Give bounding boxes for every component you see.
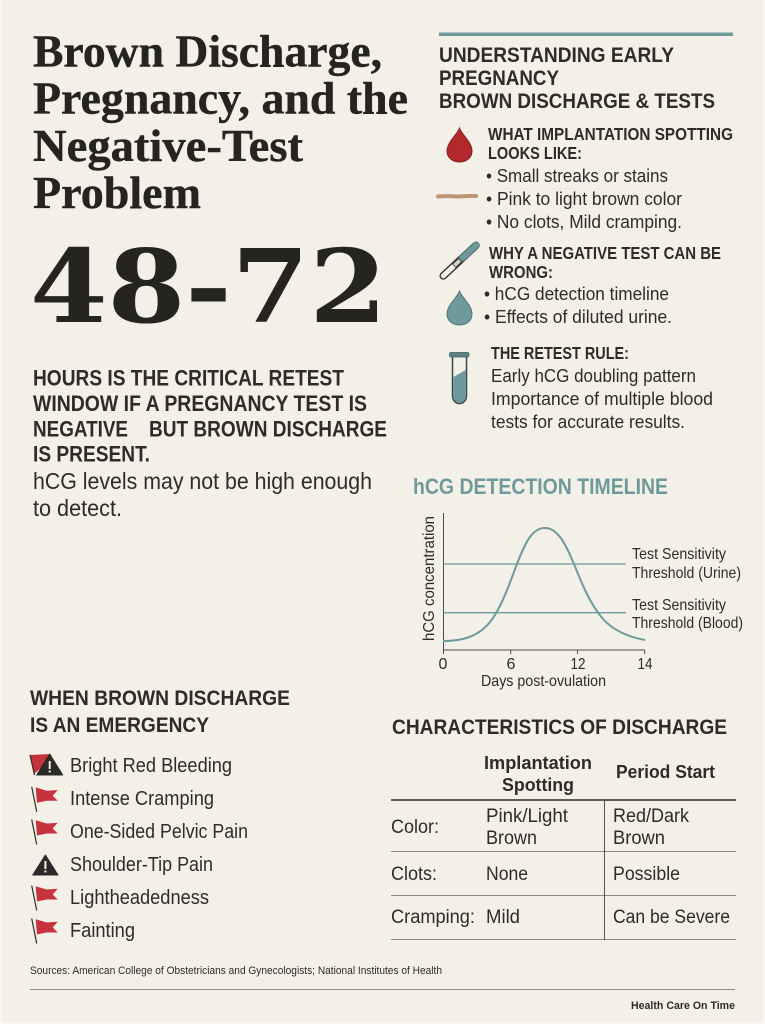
panel: understanding early pregnancy — [438, 32, 733, 432]
icon: brown streak — [438, 194, 476, 198]
table cells: Possible — [613, 864, 680, 885]
axis label: x: Days post-ovulation — [481, 673, 606, 690]
text block: implantation spotting: WHAT IMPLANTATION SPOTTING — [488, 124, 733, 144]
text block: implantation spotting: • Small streaks or stains — [486, 165, 668, 186]
heading: understanding — [439, 43, 715, 113]
axis label: y: hCG concentration — [421, 516, 438, 641]
text block: retest window: hCG levels may not be high enough — [33, 468, 372, 494]
column headers: Spotting — [502, 775, 574, 795]
list: warning signs: Shoulder-Tip Pain — [70, 854, 213, 876]
icon: water drop — [447, 291, 472, 325]
column headers — [484, 753, 715, 795]
text block: retest window — [33, 366, 387, 521]
icon: flag — [32, 787, 58, 812]
title: Negative-Test — [33, 121, 303, 171]
title — [33, 26, 408, 218]
icon: flag and warning — [30, 754, 63, 775]
tick labels — [439, 656, 653, 673]
text block: retest window: to detect. — [33, 495, 122, 521]
text block: retest rule: THE RETEST RULE: — [491, 343, 629, 363]
text block: implantation spotting: • Pink to light brown color — [486, 188, 682, 209]
list: warning signs — [70, 755, 248, 942]
heading: characteristics: CHARACTERISTICS OF DISCHARGE — [392, 715, 727, 739]
panel: characteristics table — [391, 715, 736, 940]
icon: flag — [32, 918, 58, 944]
threshold labels: Test Sensitivity — [632, 597, 726, 614]
text block: implantation spotting — [486, 124, 733, 232]
icon: blood drop — [447, 128, 472, 162]
panel: emergency signs — [30, 687, 290, 944]
heading: understanding: PREGNANCY — [439, 66, 559, 90]
text block: retest window: HOURS IS THE CRITICAL RETEST — [33, 366, 344, 390]
table cells: Brown — [486, 828, 537, 849]
icon: flag — [32, 820, 58, 844]
text block: retest window: IS PRESENT. — [33, 442, 150, 466]
threshold labels: Threshold (Blood) — [632, 615, 743, 632]
table cells: Red/Dark — [613, 806, 689, 827]
list: warning signs: One-Sided Pelvic Pain — [70, 821, 248, 843]
threshold labels: Test Sensitivity — [632, 546, 726, 563]
column headers: Implantation — [484, 753, 592, 773]
title: Brown Discharge, — [33, 26, 382, 76]
table cells: Can be Severe — [613, 907, 730, 928]
title: Pregnancy, and the — [33, 74, 408, 124]
list: warning signs: Fainting — [70, 920, 135, 942]
heading: hCG detection timeline: hCG DETECTION TIMELINE — [413, 474, 668, 499]
icon: test tube — [450, 352, 469, 404]
text block: retest window: WINDOW IF A PREGNANCY TEST IS — [33, 391, 367, 416]
line chart: hCG timeline — [421, 513, 743, 690]
text block: retest rule: Early hCG doubling pattern — [491, 365, 696, 386]
heading: emergency: WHEN BROWN DISCHARGE — [30, 687, 290, 710]
tick labels: 14 — [638, 656, 653, 673]
tick labels: 6 — [507, 656, 516, 673]
table cells — [391, 806, 730, 928]
text block: retest rule — [491, 343, 713, 432]
text block: retest window: BUT BROWN DISCHARGE — [149, 416, 387, 442]
text block: negative test: WHY A NEGATIVE TEST CAN BE — [489, 243, 721, 263]
big number: 48-72: 48-72 — [30, 227, 387, 346]
heading: understanding: BROWN DISCHARGE & TESTS — [439, 89, 715, 113]
table cells: Color: — [391, 817, 439, 838]
icon: flag — [32, 886, 58, 910]
title: Problem — [33, 168, 201, 218]
table cells: Pink/Light — [486, 806, 569, 827]
threshold labels: Threshold (Urine) — [632, 565, 741, 582]
heading: emergency — [30, 687, 290, 737]
list: warning signs: Bright Red Bleeding — [70, 755, 232, 777]
list: warning signs: Intense Cramping — [70, 788, 214, 810]
text block: implantation spotting: LOOKS LIKE: — [488, 143, 582, 163]
text block: retest window: NEGATIVE — [33, 416, 128, 442]
icon: pregnancy test — [439, 241, 480, 280]
column headers: Period Start — [616, 762, 715, 782]
table cells: Cramping: — [391, 907, 475, 928]
brand credit: Health Care On Time — [631, 1000, 735, 1012]
icon: warning — [33, 855, 58, 875]
list: warning signs: Lightheadedness — [70, 887, 209, 909]
text block: retest rule: tests for accurate results. — [491, 411, 685, 432]
threshold labels — [632, 546, 743, 632]
sources: Sources: American College of Obstetricians and Gynecologists; National Institutes of Health — [30, 965, 442, 977]
table cells: Clots: — [391, 864, 437, 885]
table cells: Brown — [613, 828, 665, 849]
tick labels: 12 — [570, 656, 586, 673]
text block: negative test: WRONG: — [489, 262, 553, 282]
text block: negative test: • Effects of diluted urine. — [484, 306, 672, 327]
text block: retest rule: Importance of multiple blood — [491, 388, 713, 409]
table rules — [391, 800, 736, 940]
table cells: Mild — [486, 907, 520, 928]
text block: implantation spotting: • No clots, Mild cramping. — [486, 211, 682, 232]
text block: negative test — [484, 243, 721, 327]
heading: understanding: UNDERSTANDING EARLY — [439, 43, 674, 67]
table cells: None — [486, 864, 528, 885]
tick labels: 0 — [439, 656, 448, 673]
text block: negative test: • hCG detection timeline — [484, 283, 669, 304]
heading: emergency: IS AN EMERGENCY — [30, 714, 209, 737]
